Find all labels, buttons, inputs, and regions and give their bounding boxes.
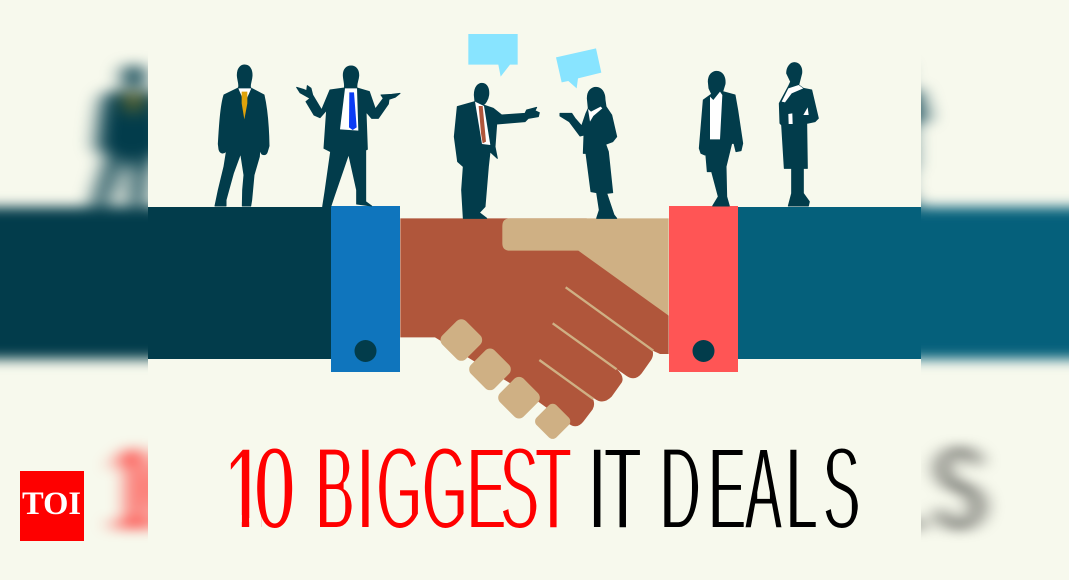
handshake scene — [148, 34, 921, 441]
tan hand — [502, 218, 669, 316]
right sleeve — [738, 207, 921, 359]
man with blue tie — [297, 66, 400, 207]
title red part: BIGGEST — [316, 422, 571, 554]
brown hand — [400, 218, 669, 426]
speech bubble right — [556, 48, 601, 88]
title black part: DEALS — [660, 423, 860, 555]
title black part: IT — [589, 423, 641, 554]
left cuff button — [354, 340, 376, 362]
speaking man and bubble — [454, 34, 539, 218]
speech bubble left — [468, 34, 518, 77]
knuckles — [438, 316, 572, 441]
right cuff button — [692, 340, 714, 362]
handshake — [400, 218, 669, 441]
women silhouettes — [560, 63, 818, 218]
woman speaking — [560, 87, 617, 218]
red cuff — [669, 206, 738, 372]
man with red tie — [454, 83, 539, 218]
TOI logo — [20, 471, 84, 541]
TOI logo: TOI — [22, 486, 81, 522]
woman in white shirt — [699, 71, 743, 206]
man with gold tie — [215, 65, 269, 206]
central panel — [148, 0, 921, 580]
woman in skirt suit — [779, 63, 818, 206]
title — [225, 422, 860, 555]
left sleeve — [148, 207, 332, 359]
finger lines — [539, 287, 653, 399]
blue cuff — [331, 206, 400, 372]
two men silhouettes — [215, 65, 400, 207]
title red part: 10 — [225, 422, 294, 554]
